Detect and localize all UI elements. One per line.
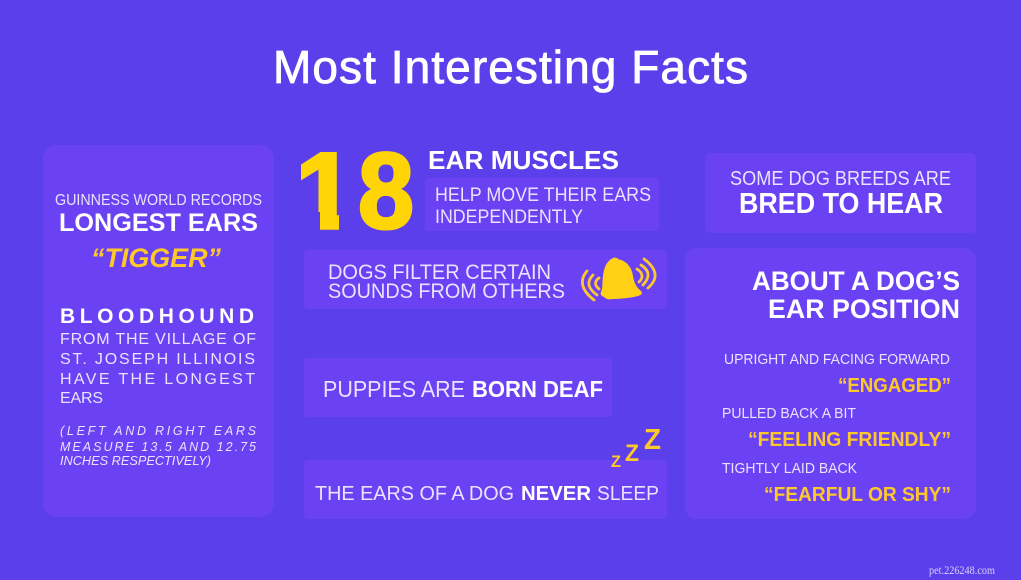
heading: ear muscles: EAR MUSCLES [428,145,619,175]
panel: longest ears record: ST. JOSEPH ILLINOIS [60,351,255,368]
panel: ear position: “ENGAGED” [838,375,951,397]
panel: bred to hear [705,153,976,233]
panel: longest ears record: (LEFT AND RIGHT EARS [60,424,257,438]
big number 18: 1 [295,130,355,251]
panel: longest ears record: MEASURE 13.5 AND 12.75 [60,440,256,454]
panel: help move their ears: HELP MOVE THEIR EARS [435,185,651,206]
panel: ear position: ABOUT A DOG’S [752,266,960,296]
panel: longest ears record: GUINNESS WORLD RECORDS [55,192,262,209]
panel: longest ears record: LONGEST EARS [59,209,258,237]
panel: longest ears record: INCHES RESPECTIVELY) [60,454,211,468]
panel: bred to hear: SOME DOG BREEDS ARE [730,168,951,190]
icon: sleeping z letters: Z [644,424,661,456]
panel: ears never sleep: THE EARS OF A DOG [315,483,514,505]
panel: puppies are born deaf: PUPPIES ARE [323,376,465,402]
panel: longest ears record: BLOODHOUND [60,305,254,328]
panel: ear position: “FEARFUL OR SHY” [764,484,951,506]
panel: bred to hear: BRED TO HEAR [739,188,943,220]
panel: ear position: UPRIGHT AND FACING FORWARD [724,352,950,368]
panel: longest ears record: HAVE THE LONGEST [60,371,255,388]
icon: sleeping z letters [611,424,661,471]
panel: dogs filter sounds: SOUNDS FROM OTHERS [328,280,565,303]
panel: ear position: TIGHTLY LAID BACK [722,461,857,477]
panel: ear position: EAR POSITION [768,294,960,324]
panel: ear position: “FEELING FRIENDLY” [748,429,951,451]
panel: ears never sleep: NEVER [521,483,592,505]
icon: sleeping z letters: Z [611,452,621,471]
panel: puppies are born deaf [304,358,612,417]
icon: ringing bell [582,258,655,300]
panel: longest ears record [43,145,274,517]
panel: ears never sleep: SLEEP [597,483,659,505]
panel: help move their ears [425,178,659,231]
big number 18 [301,151,412,230]
panel: ear position: PULLED BACK A BIT [722,406,856,422]
big number 18: 8 [358,130,414,251]
title: Most Interesting Facts [273,41,748,93]
panel: longest ears record: “TIGGER” [91,243,221,273]
watermark: pet.226248.com [929,565,995,577]
icon: sleeping z letters: Z [625,440,639,467]
panel: help move their ears: INDEPENDENTLY [435,207,583,228]
panel: dogs filter sounds [304,250,667,309]
panel: puppies are born deaf: BORN DEAF [472,376,603,402]
panel: ear position [685,248,976,519]
panel: longest ears record: EARS [60,390,103,407]
panel: longest ears record: FROM THE VILLAGE OF [60,331,256,348]
panel: ears never sleep [304,460,667,519]
panel: dogs filter sounds: DOGS FILTER CERTAIN [328,261,551,284]
